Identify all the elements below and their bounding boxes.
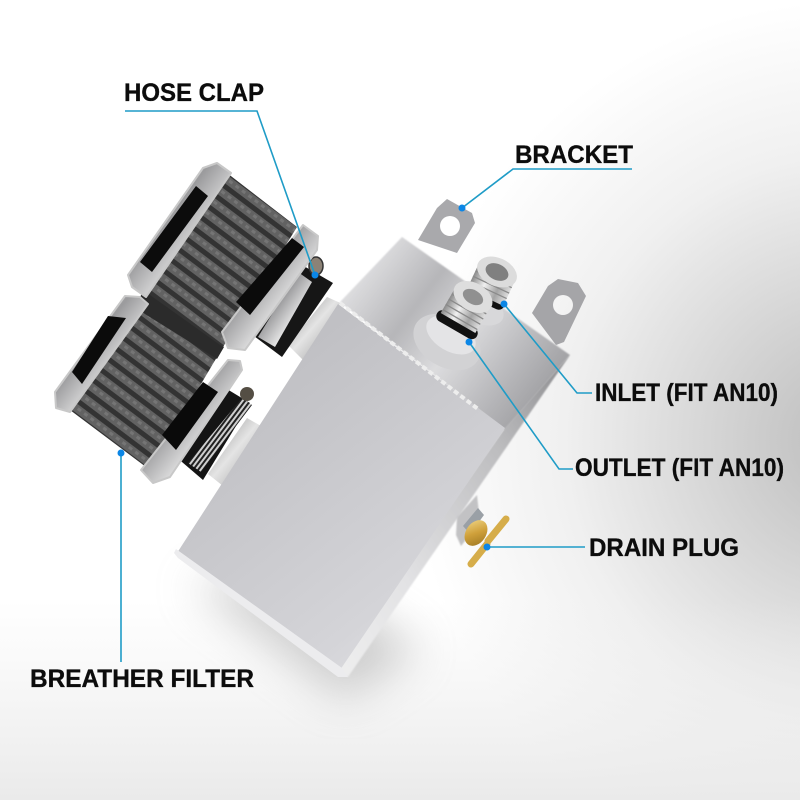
- weld mount: [456, 495, 480, 546]
- leader: bracket: [458, 169, 632, 212]
- inlet fitting: [451, 249, 526, 332]
- wing nut: [460, 516, 492, 550]
- hex nut: [420, 308, 482, 362]
- top plate: [340, 237, 570, 430]
- spigot: [288, 297, 345, 362]
- leader: drain plug: [484, 544, 585, 550]
- side strip: [335, 355, 570, 677]
- leader: hose clap: [125, 111, 318, 278]
- bottom edge: [174, 549, 348, 677]
- drain plug: [456, 495, 506, 564]
- tank: [174, 199, 586, 677]
- mesh: [70, 307, 217, 470]
- bolt: [463, 508, 484, 534]
- leader: inlet: [500, 300, 592, 393]
- rubber hose: [168, 383, 250, 480]
- label: bracket: BRACKET: [515, 141, 633, 169]
- leader: breather filter: [118, 450, 124, 662]
- spigot: [208, 418, 268, 490]
- end cap: [55, 296, 148, 412]
- front face: [177, 304, 505, 670]
- clamp screw: [309, 257, 323, 275]
- lower breather filter: [55, 288, 268, 490]
- label: hose clap: HOSE CLAP: [124, 79, 264, 107]
- weld seam: [340, 303, 478, 409]
- hose clamp: [258, 272, 312, 347]
- hose clamp: [188, 398, 252, 472]
- leader: outlet: [466, 338, 573, 469]
- end cap: [128, 163, 231, 297]
- rubber hose: [250, 258, 333, 357]
- gap shadow between filters: [137, 288, 224, 359]
- base dome: [403, 302, 491, 382]
- label: breather filter: BREATHER FILTER: [30, 665, 254, 693]
- bracket: right: [532, 279, 586, 345]
- label: drain plug: DRAIN PLUG: [589, 534, 739, 562]
- outlet fitting: [403, 267, 511, 382]
- label: inlet: INLET (FIT AN10): [595, 379, 778, 407]
- upper breather filter: [128, 163, 345, 362]
- mesh: [143, 173, 297, 347]
- base ring: [222, 225, 318, 350]
- base: [451, 284, 509, 332]
- clamp screw: [240, 387, 254, 401]
- base ring: [141, 360, 242, 483]
- label: outlet: OUTLET (FIT AN10): [575, 454, 784, 482]
- bracket: left: [418, 199, 475, 253]
